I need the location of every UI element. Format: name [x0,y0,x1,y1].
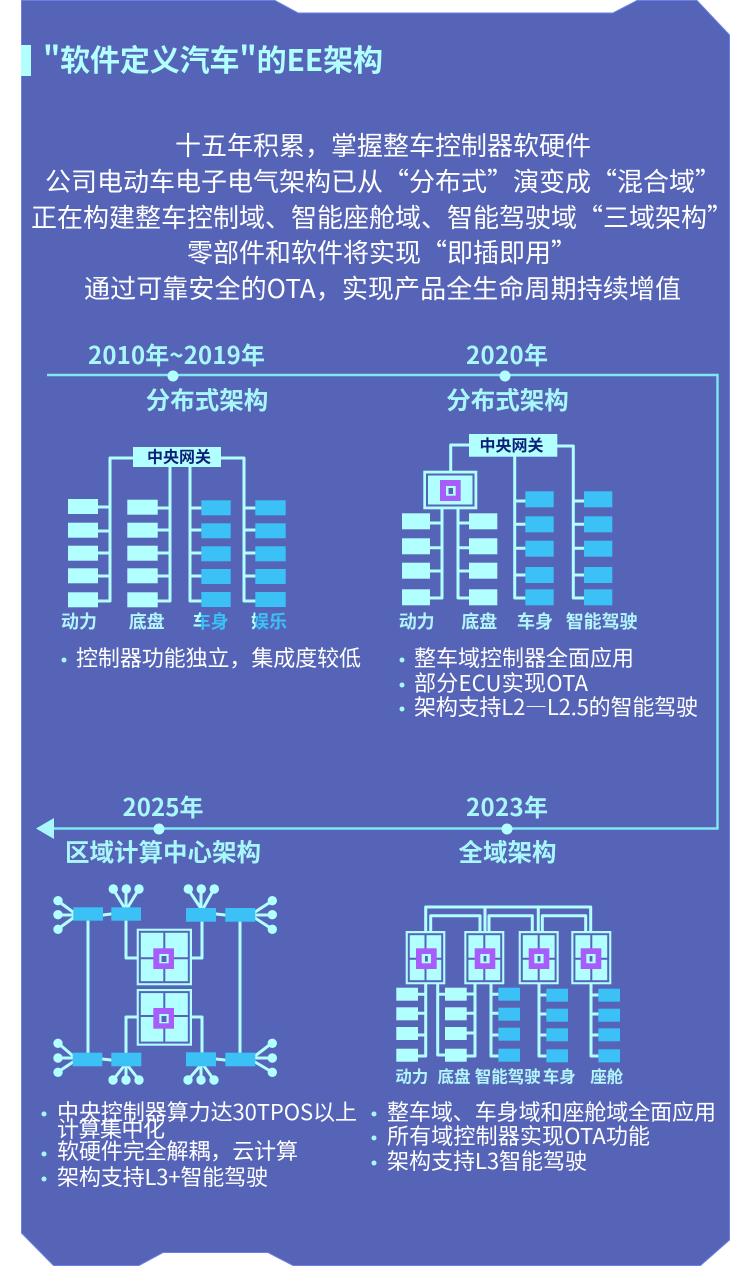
central compute chip 1 [137,929,192,985]
diagram: 2020 distributed architecture: 底盘 [461,608,497,634]
bullet list: 2025: 软硬件完全解耦，云计算 [57,1134,298,1166]
year label: 2023: 2023年 [466,788,548,823]
diagram: full domain architecture: 座舱 [590,1064,624,1088]
year label: 2025: 2025年 [122,788,204,823]
intro text block: 十五年积累，掌握整车控制器软硬件 [175,126,591,163]
bullet list: 2023: 架构支持L3智能驾驶 [387,1144,587,1176]
bullet list: 2025: 架构支持L3+智能驾驶 [57,1160,268,1192]
diagram: 2010 distributed architecture [61,444,287,634]
bullet list: 2023 [372,1095,716,1176]
heading: distributed 2010: 分布式架构 [146,382,268,417]
central compute chip 2 [137,989,192,1046]
diagram: full domain architecture: 车身 [543,1064,576,1088]
heading: distributed 2020: 分布式架构 [446,382,569,417]
diagram: full domain architecture [395,907,624,1088]
title: "软件定义汽车"的EE架构 [43,36,383,80]
bullet list: 2020: 部分ECU实现OTA [414,666,589,698]
bullet list: 2010: 控制器功能独立，集成度较低 [76,641,361,673]
bullet list: 2023: 整车域、车身域和座舱域全面应用 [387,1095,716,1127]
diagram: 2020 distributed architecture: 车身 [517,608,553,634]
intro text block: 通过可靠安全的OTA，实现产品全生命周期持续增值 [84,269,681,306]
bullet list: 2020 [400,641,698,722]
domain chip 1 [406,931,445,984]
diagram: 2010 distributed architecture: 底盘 [129,608,165,634]
diagram: full domain architecture: 底盘 [438,1064,470,1088]
domain controller chip [423,471,477,509]
domain chip 2 [464,931,504,984]
bullet list: 2023: 所有域控制器实现OTA功能 [387,1119,650,1151]
bullet list: 2020: 架构支持L2—L2.5的智能驾驶 [414,690,698,722]
intro text block: 零部件和软件将实现“即插即用” [187,233,577,270]
bullet list: 2020: 整车域控制器全面应用 [414,641,634,673]
year label: 2020: 2020年 [466,336,548,371]
diagram: 2020 distributed architecture: 智能驾驶 [566,608,638,634]
diagram: 2010 distributed architecture: 车身 [193,608,229,634]
heading: full domain: 全域架构 [458,834,556,869]
gateway box: 中央网关 [147,444,211,468]
gateway box: 中央网关 [479,432,544,456]
intro text block: 公司电动车电子电气架构已从“分布式”演变成“混合域” [45,162,721,199]
domain chip 4 [571,931,611,984]
heading: zonal: 区域计算中心架构 [65,834,261,869]
diagram: 2010 distributed architecture: 娱乐 [251,608,287,634]
bullet list: 2025: 中央控制器算力达30TPOS以上 [57,1095,357,1127]
sensor nodes [53,884,277,1085]
diagram: zonal computing architecture [53,884,277,1085]
intro text block [31,126,730,306]
domain chip 3 [519,931,559,984]
bullet list: 2025: 计算集中化 [57,1112,165,1144]
diagram: 2020 distributed architecture: 动力 [399,608,435,634]
diagram: 2010 distributed architecture: 动力 [61,608,97,634]
diagram: full domain architecture: 智能驾驶 [475,1064,541,1088]
diagram: full domain architecture: 动力 [395,1064,428,1088]
diagram: 2020 distributed architecture [399,432,638,634]
bullet list: 2025 [42,1095,357,1192]
timeline arrow [36,370,718,839]
year label: 2010-2019: 2010年~2019年 [88,336,265,371]
intro text block: 正在构建整车控制域、智能座舱域、智能驾驶域“三域架构” [31,198,730,235]
